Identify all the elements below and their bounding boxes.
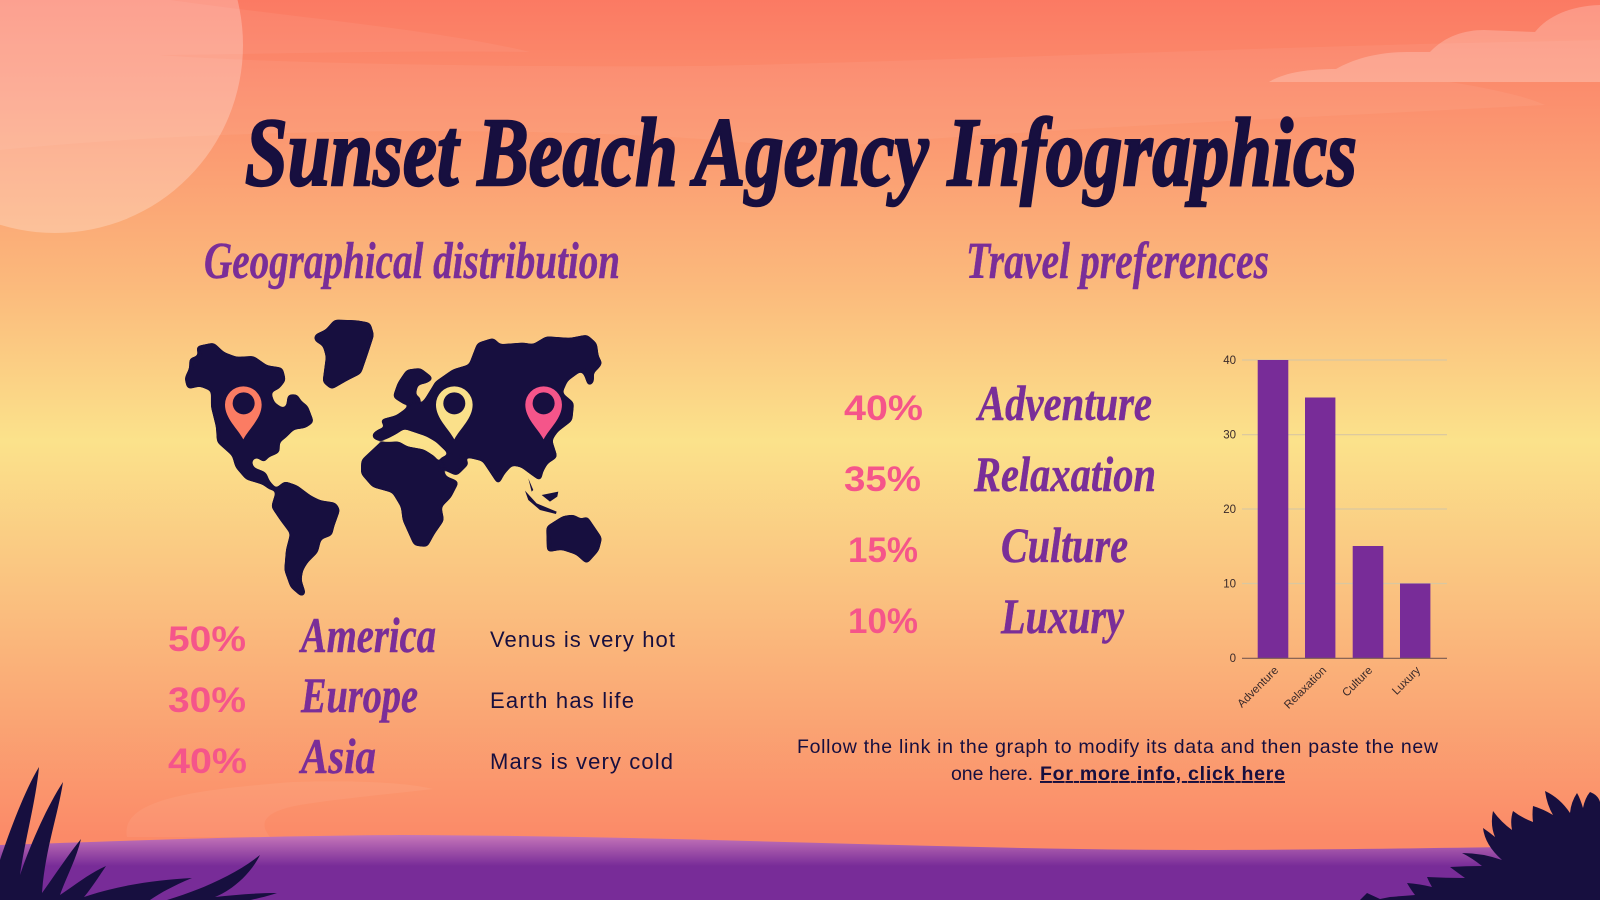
map: australia <box>548 516 601 562</box>
cloud: top right <box>1269 5 1600 82</box>
row: adventure: Adventure <box>976 375 1152 431</box>
note text <box>797 736 1439 785</box>
row: culture <box>848 517 1128 573</box>
pin: asia <box>525 386 562 439</box>
pin: america <box>225 386 262 439</box>
x axis labels: Culture <box>1340 665 1375 699</box>
clouds: upper wisps <box>0 0 1600 150</box>
y axis labels <box>1223 355 1236 665</box>
row: asia: Mars is very cold <box>490 749 673 774</box>
row: europe: 30% <box>168 681 246 720</box>
y axis labels: 30 <box>1223 430 1236 442</box>
map: africa <box>362 443 457 546</box>
row: culture: Culture <box>1001 517 1128 573</box>
row: europe <box>168 667 634 723</box>
row: luxury: Luxury <box>1000 588 1125 644</box>
row: culture: 15% <box>848 531 918 570</box>
row: europe: Europe <box>300 667 418 723</box>
note text: one here. <box>951 763 1033 785</box>
row: adventure: 40% <box>844 389 923 428</box>
row: europe: Earth has life <box>490 688 634 713</box>
y axis labels: 0 <box>1230 653 1236 665</box>
row: relaxation <box>844 446 1156 502</box>
heading: geographical distribution: Geographical distribution <box>204 233 620 290</box>
y axis labels: 10 <box>1223 578 1236 590</box>
map: south america <box>273 483 339 595</box>
map: greenland <box>316 321 373 388</box>
plant: bottom left <box>0 767 277 900</box>
world map <box>186 321 601 595</box>
row: adventure <box>844 375 1152 431</box>
bar chart <box>1223 355 1447 712</box>
cloud: bottom left <box>127 781 433 837</box>
row: luxury <box>848 588 1125 644</box>
pin: europe <box>436 386 473 439</box>
bars <box>1258 360 1430 658</box>
y axis labels: 20 <box>1223 504 1236 516</box>
row: america <box>168 607 675 663</box>
x axis labels <box>1236 664 1423 712</box>
row: relaxation: Relaxation <box>973 446 1156 502</box>
note text: For more info, click here <box>1040 763 1285 785</box>
row: luxury: 10% <box>848 602 918 641</box>
note text: Follow the link in the graph to modify its data and then paste the new <box>797 736 1439 758</box>
sun <box>0 0 243 233</box>
x axis labels: Adventure <box>1236 665 1281 710</box>
row: america: America <box>299 607 436 663</box>
row: america: 50% <box>168 620 246 659</box>
x axis labels: Relaxation <box>1282 665 1329 712</box>
map: indonesia islands <box>525 478 558 514</box>
map: eurasia <box>373 336 601 483</box>
x axis labels: Luxury <box>1390 664 1423 698</box>
map: north america <box>186 344 312 490</box>
heading: travel preferences: Travel preferences <box>966 233 1269 290</box>
purple ground band <box>0 835 1600 900</box>
row: america: Venus is very hot <box>490 627 675 652</box>
row: asia <box>168 728 673 784</box>
plant: bottom right <box>1360 791 1600 900</box>
y axis labels: 40 <box>1223 355 1236 367</box>
row: asia: Asia <box>299 728 376 784</box>
row: asia: 40% <box>168 742 247 781</box>
row: relaxation: 35% <box>844 460 921 499</box>
